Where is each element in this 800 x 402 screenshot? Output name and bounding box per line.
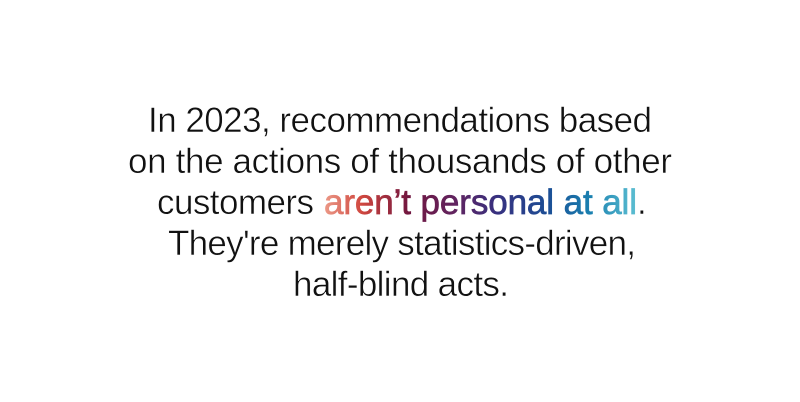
line 1: In 2023, recommendations based xyxy=(148,101,652,140)
line 3: customers: customers xyxy=(157,183,314,222)
line 5: half-blind acts. xyxy=(293,265,509,304)
line 2: on the actions of thousands of other xyxy=(128,142,672,181)
line 4: They're merely statistics-driven, xyxy=(168,224,636,263)
line 3: period: . xyxy=(637,183,647,222)
line 3: gradient highlighted phrase: aren’t personal at all xyxy=(324,183,637,222)
quote text block xyxy=(128,101,672,304)
